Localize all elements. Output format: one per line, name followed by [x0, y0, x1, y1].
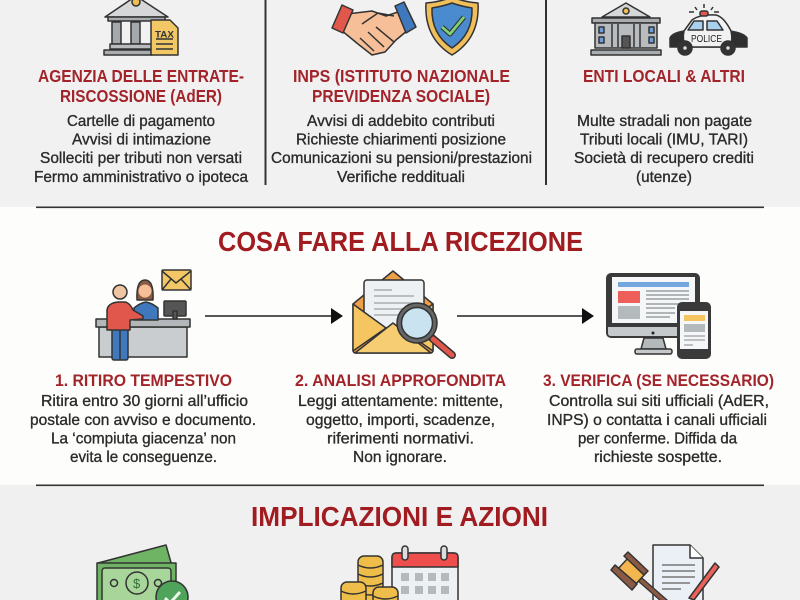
icon: shield with check: [426, 0, 478, 55]
arrow: step 2 to step 3: [457, 308, 594, 324]
icon: coins and calendar: [341, 546, 458, 600]
text block: step 3: Controlla sui siti ufficiali (AdER,: [549, 393, 769, 410]
heading: step 1: 1. RITIRO TEMPESTIVO: [55, 371, 232, 390]
text block: Agenzia delle Entrate items: [34, 113, 248, 186]
heading: INPS: INPS (ISTITUTO NAZIONALE: [293, 66, 510, 86]
icon: banknotes with check: $: [133, 576, 141, 591]
text block: Agenzia delle Entrate items: Solleciti per tributi non versati: [40, 150, 242, 167]
text block: INPS items: Comunicazioni su pensioni/prestazioni: [271, 150, 532, 167]
panel: Enti locali: [574, 3, 754, 186]
text block: step 2: riferimenti normativi.: [327, 430, 474, 448]
text block: Enti locali items: Tributi locali (IMU, TARI): [580, 132, 748, 148]
text block: step 1: La ‘compiuta giacenza’ non: [51, 430, 236, 448]
icon: banknotes with check: [97, 545, 188, 600]
heading: Agenzia delle Entrate: AGENZIA DELLE ENTRATE-: [38, 66, 244, 86]
icon: bank with tax document: TAX: [155, 30, 174, 40]
panel: Agenzia delle Entrate: [34, 0, 248, 186]
text block: INPS items: Verifiche reddituali: [337, 169, 465, 186]
icon: envelope with magnifier: [353, 271, 452, 355]
text block: step 1: Ritira entro 30 giorni all’ufficio: [41, 393, 248, 410]
text block: INPS items: Avvisi di addebito contributi: [307, 113, 495, 130]
icon: monitor and smartphone: [606, 273, 711, 359]
heading: Enti locali: ENTI LOCALI & ALTRI: [583, 66, 745, 86]
text block: Agenzia delle Entrate items: Fermo amministrativo o ipoteca: [34, 169, 248, 186]
text block: INPS items: Richieste chiarimenti posizione: [296, 132, 506, 148]
text block: step 3: [547, 393, 769, 466]
arrow: step 1 to step 2: [205, 308, 343, 324]
text block: step 1: evita le conseguenze.: [70, 449, 217, 466]
text block: Enti locali items: Multe stradali non pagate: [577, 113, 752, 130]
icon: handshake: [332, 2, 416, 55]
heading: Implicazioni e azioni: IMPLICAZIONI E AZIONI: [251, 501, 548, 532]
text block: step 2: Leggi attentamente: mittente,: [298, 393, 503, 410]
icon: police car: POLICE: [691, 34, 722, 45]
text block: Agenzia delle Entrate items: Cartelle di pagamento: [67, 113, 215, 130]
heading: Cosa fare alla ricezione: COSA FARE ALLA RICEZIONE: [218, 226, 583, 257]
text block: Enti locali items: [574, 113, 754, 186]
heading: INPS: PREVIDENZA SOCIALE): [312, 86, 490, 106]
text block: Enti locali items: Società di recupero crediti: [574, 150, 754, 167]
text block: step 1: postale con avviso e documento.: [30, 412, 256, 429]
icon: bank with tax document: [104, 0, 178, 55]
heading: Agenzia delle Entrate: [38, 66, 244, 106]
text block: Enti locali items: (utenze): [636, 169, 692, 186]
icon: police car: [670, 4, 747, 55]
text block: step 3: per conferme. Diffida da: [578, 430, 737, 448]
text block: step 2: [298, 393, 503, 466]
icon: post office counter: [96, 270, 191, 360]
step 1: ritiro tempestivo: [30, 270, 256, 466]
panel: INPS: [271, 0, 532, 186]
text block: Agenzia delle Entrate items: Avvisi di intimazione: [72, 132, 211, 148]
text block: step 1: [30, 393, 256, 466]
text block: step 2: Non ignorare.: [353, 449, 447, 466]
heading: step 3: 3. VERIFICA (SE NECESSARIO): [543, 371, 774, 390]
step 3: verifica: [543, 273, 774, 466]
text block: step 3: richieste sospette.: [594, 449, 722, 466]
heading: Agenzia delle Entrate: RISCOSSIONE (AdER): [60, 86, 222, 106]
icon: gavel, document and pen: [611, 545, 719, 600]
heading: step 2: 2. ANALISI APPROFONDITA: [295, 371, 506, 390]
text block: step 2: oggetto, importi, scadenze,: [306, 412, 495, 429]
heading: INPS: [293, 66, 510, 106]
text block: INPS items: [271, 113, 532, 186]
text block: step 3: INPS) o contatta i canali ufficiali: [547, 412, 767, 429]
icon: municipal building: [591, 3, 661, 55]
step 2: analisi approfondita: [295, 271, 506, 466]
